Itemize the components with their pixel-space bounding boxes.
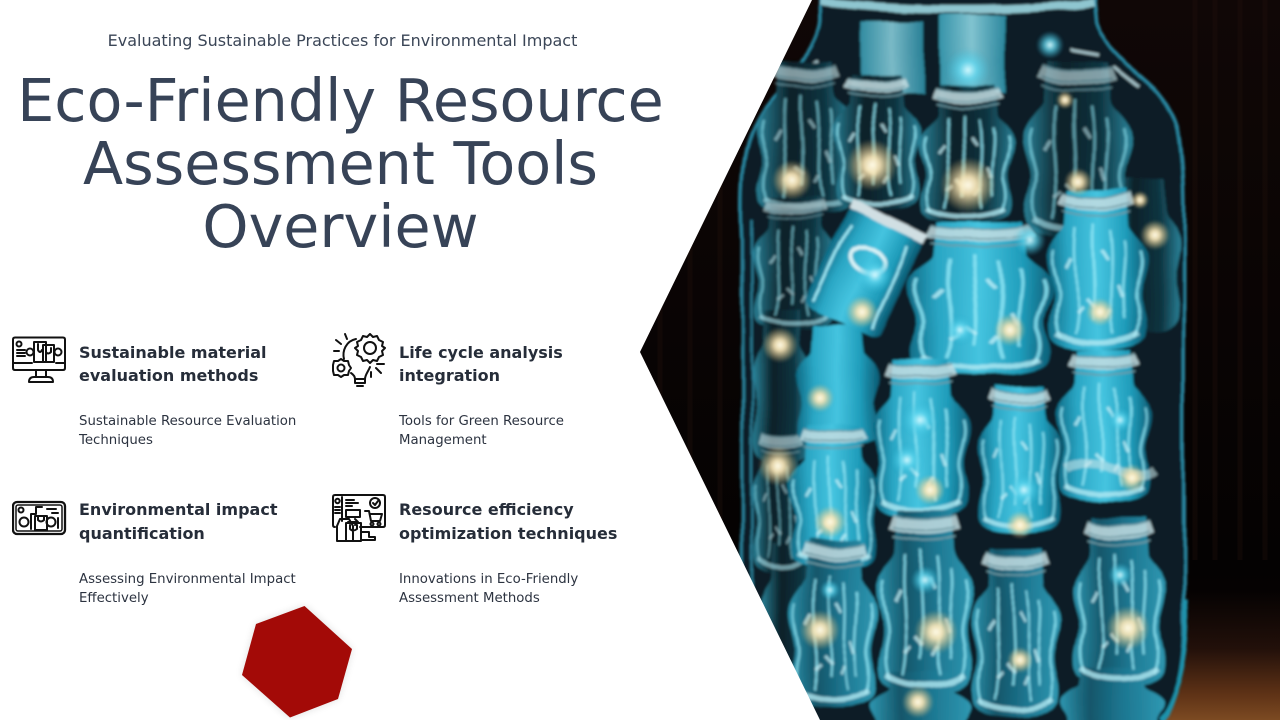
heading bbox=[79, 500, 278, 542]
middle jars bbox=[796, 190, 1149, 445]
description: Innovations in Eco-Friendly bbox=[399, 572, 578, 587]
description: Assessing Environmental Impact bbox=[79, 572, 296, 587]
description bbox=[78, 414, 296, 448]
heading: evaluation methods bbox=[79, 366, 258, 385]
subtitle: Evaluating Sustainable Practices for Environmental Impact bbox=[108, 31, 577, 50]
back jars bbox=[753, 62, 1179, 689]
heading: Resource efficiency bbox=[399, 500, 574, 519]
title: Eco-Friendly Resource bbox=[17, 66, 664, 134]
heading: optimization techniques bbox=[399, 524, 617, 542]
description: Sustainable Resource Evaluation bbox=[79, 414, 296, 429]
icon: tablet with product cards bbox=[12, 500, 66, 536]
heading: quantification bbox=[79, 524, 205, 542]
heading: Life cycle analysis bbox=[399, 343, 563, 362]
icon: light bulb with gears bbox=[332, 333, 386, 387]
lower rows bbox=[789, 350, 1152, 569]
heading bbox=[79, 343, 267, 385]
item: resource efficiency optimization techniques bbox=[332, 494, 617, 606]
title bbox=[17, 66, 664, 261]
item: sustainable material evaluation methods bbox=[12, 336, 296, 448]
icon: monitor with cart and bags bbox=[332, 494, 386, 542]
description: Tools for Green Resource bbox=[399, 414, 564, 429]
description: Management bbox=[399, 433, 487, 448]
description bbox=[399, 572, 578, 606]
photo background bbox=[640, 0, 1280, 720]
upper front jars bbox=[860, 22, 925, 94]
description: Techniques bbox=[79, 433, 153, 448]
title: Overview bbox=[202, 193, 479, 261]
tilted jar bbox=[803, 198, 928, 340]
photo lights bbox=[758, 31, 1170, 718]
heading bbox=[399, 343, 563, 385]
title: Assessment Tools bbox=[83, 130, 598, 198]
description bbox=[398, 414, 564, 448]
item: environmental impact quantification bbox=[12, 500, 296, 606]
large jar bbox=[741, 0, 1184, 720]
decorative red hexagon bbox=[241, 606, 353, 718]
heading: Sustainable material bbox=[79, 343, 267, 362]
description: Effectively bbox=[79, 591, 149, 606]
icon: monitor with product cards bbox=[12, 336, 66, 383]
heading: integration bbox=[399, 366, 500, 385]
heading: Environmental impact bbox=[79, 500, 277, 519]
description bbox=[79, 572, 296, 606]
heading bbox=[399, 500, 617, 542]
item: life cycle analysis integration bbox=[332, 333, 564, 448]
white panel with angled edge bbox=[640, 0, 820, 720]
description: Assessment Methods bbox=[399, 591, 540, 606]
